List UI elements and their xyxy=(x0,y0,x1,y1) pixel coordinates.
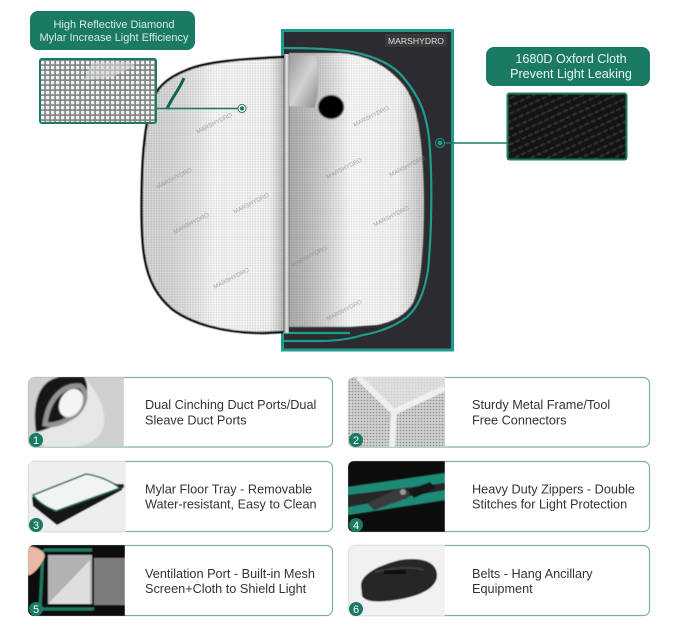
photo: floor tray xyxy=(28,461,126,532)
callout: reflective mylar xyxy=(30,11,246,123)
text: metal frame xyxy=(472,398,610,428)
watermarks on mylar: MARSHYDRO xyxy=(173,212,211,236)
photo: frame connector xyxy=(348,377,445,447)
teal zipper trim xyxy=(283,48,431,341)
mylar swatch xyxy=(40,59,156,123)
heading: oxford: 1680D Oxford Cloth xyxy=(515,52,627,66)
text: duct ports: Dual Cinching Duct Ports/Dual xyxy=(145,398,316,412)
badge 3 xyxy=(29,518,43,532)
badge 5: 5 xyxy=(33,604,39,616)
text: duct ports xyxy=(145,398,316,428)
badge 4: 4 xyxy=(353,520,359,532)
oxford swatch xyxy=(508,94,626,160)
text: belts xyxy=(472,567,593,596)
watermarks on mylar: MARSHYDRO xyxy=(326,157,364,181)
heading: mylar xyxy=(30,11,195,50)
panel: metal frame xyxy=(348,377,650,447)
text: zippers xyxy=(472,482,635,512)
badge 5 xyxy=(29,602,43,616)
text: zippers: Heavy Duty Zippers - Double xyxy=(472,482,635,496)
watermarks on mylar: MARSHYDRO xyxy=(353,105,391,129)
badge 1 xyxy=(29,433,43,447)
watermarks on mylar: MARSHYDRO xyxy=(213,267,251,291)
heading: oxford: Prevent Light Leaking xyxy=(510,67,632,81)
panel: ventilation port xyxy=(28,545,332,616)
badge 2 xyxy=(349,433,363,447)
panel: floor tray xyxy=(28,461,332,532)
callout: oxford cloth xyxy=(436,47,650,160)
duct port hole xyxy=(318,95,344,119)
heading: mylar: High Reflective Diamond xyxy=(53,19,175,31)
watermarks on mylar: MARSHYDRO xyxy=(196,112,234,136)
text: metal frame: Sturdy Metal Frame/Tool xyxy=(472,398,610,412)
text: duct ports: Sleave Duct Ports xyxy=(145,414,247,428)
text: belts: Equipment xyxy=(472,582,533,596)
panel: zippers xyxy=(348,461,650,532)
photo: zipper xyxy=(348,461,445,532)
heading: oxford xyxy=(486,47,650,86)
badge 3: 3 xyxy=(33,520,39,532)
text: metal frame: Free Connectors xyxy=(472,414,566,428)
badge 2: 2 xyxy=(353,435,359,447)
heading: mylar: Mylar Increase Light Efficiency xyxy=(40,32,189,44)
badge 4 xyxy=(349,518,363,532)
panel: belts xyxy=(348,545,650,616)
tent back panel with teal border xyxy=(282,30,452,350)
watermarks on mylar: MARSHYDRO xyxy=(326,299,364,323)
photo: belts xyxy=(348,545,445,616)
brand logo: MARSHYDRO xyxy=(388,37,444,46)
watermarks on mylar: MARSHYDRO xyxy=(233,192,271,216)
text: zippers: Stitches for Light Protection xyxy=(472,498,627,512)
badge 6: 6 xyxy=(353,604,359,616)
duct sleeve xyxy=(289,56,318,108)
text: belts: Belts - Hang Ancillary xyxy=(472,567,593,581)
text: ventilation port: Ventilation Port - Built-in Mesh xyxy=(145,567,315,581)
photo: duct sleeve xyxy=(28,377,124,447)
badge 1: 1 xyxy=(33,435,39,447)
brand logo xyxy=(385,34,447,47)
text: floor tray: Water-resistant, Easy to Clean xyxy=(145,498,317,512)
text: ventilation port: Screen+Cloth to Shield Light xyxy=(145,582,307,596)
photo: ventilation port xyxy=(28,545,125,616)
grow tent illustration xyxy=(142,30,452,350)
leader line to mylar xyxy=(156,104,246,112)
watermarks on mylar: MARSHYDRO xyxy=(291,245,329,269)
open door with mylar lining xyxy=(142,57,285,333)
watermarks on mylar: MARSHYDRO xyxy=(373,205,411,229)
text: floor tray: Mylar Floor Tray - Removable xyxy=(145,482,312,496)
text: floor tray xyxy=(145,482,317,512)
panel: duct ports xyxy=(28,377,332,447)
badge 6 xyxy=(349,602,363,616)
leader line to cloth xyxy=(436,138,507,148)
tent pole xyxy=(284,54,289,333)
watermarks on mylar: MARSHYDRO xyxy=(156,167,194,191)
text: ventilation port xyxy=(145,567,315,596)
watermarks on mylar xyxy=(156,105,427,323)
watermarks on mylar: MARSHYDRO xyxy=(389,155,427,179)
inner mylar wall xyxy=(289,53,424,327)
door tie strap xyxy=(167,78,184,109)
